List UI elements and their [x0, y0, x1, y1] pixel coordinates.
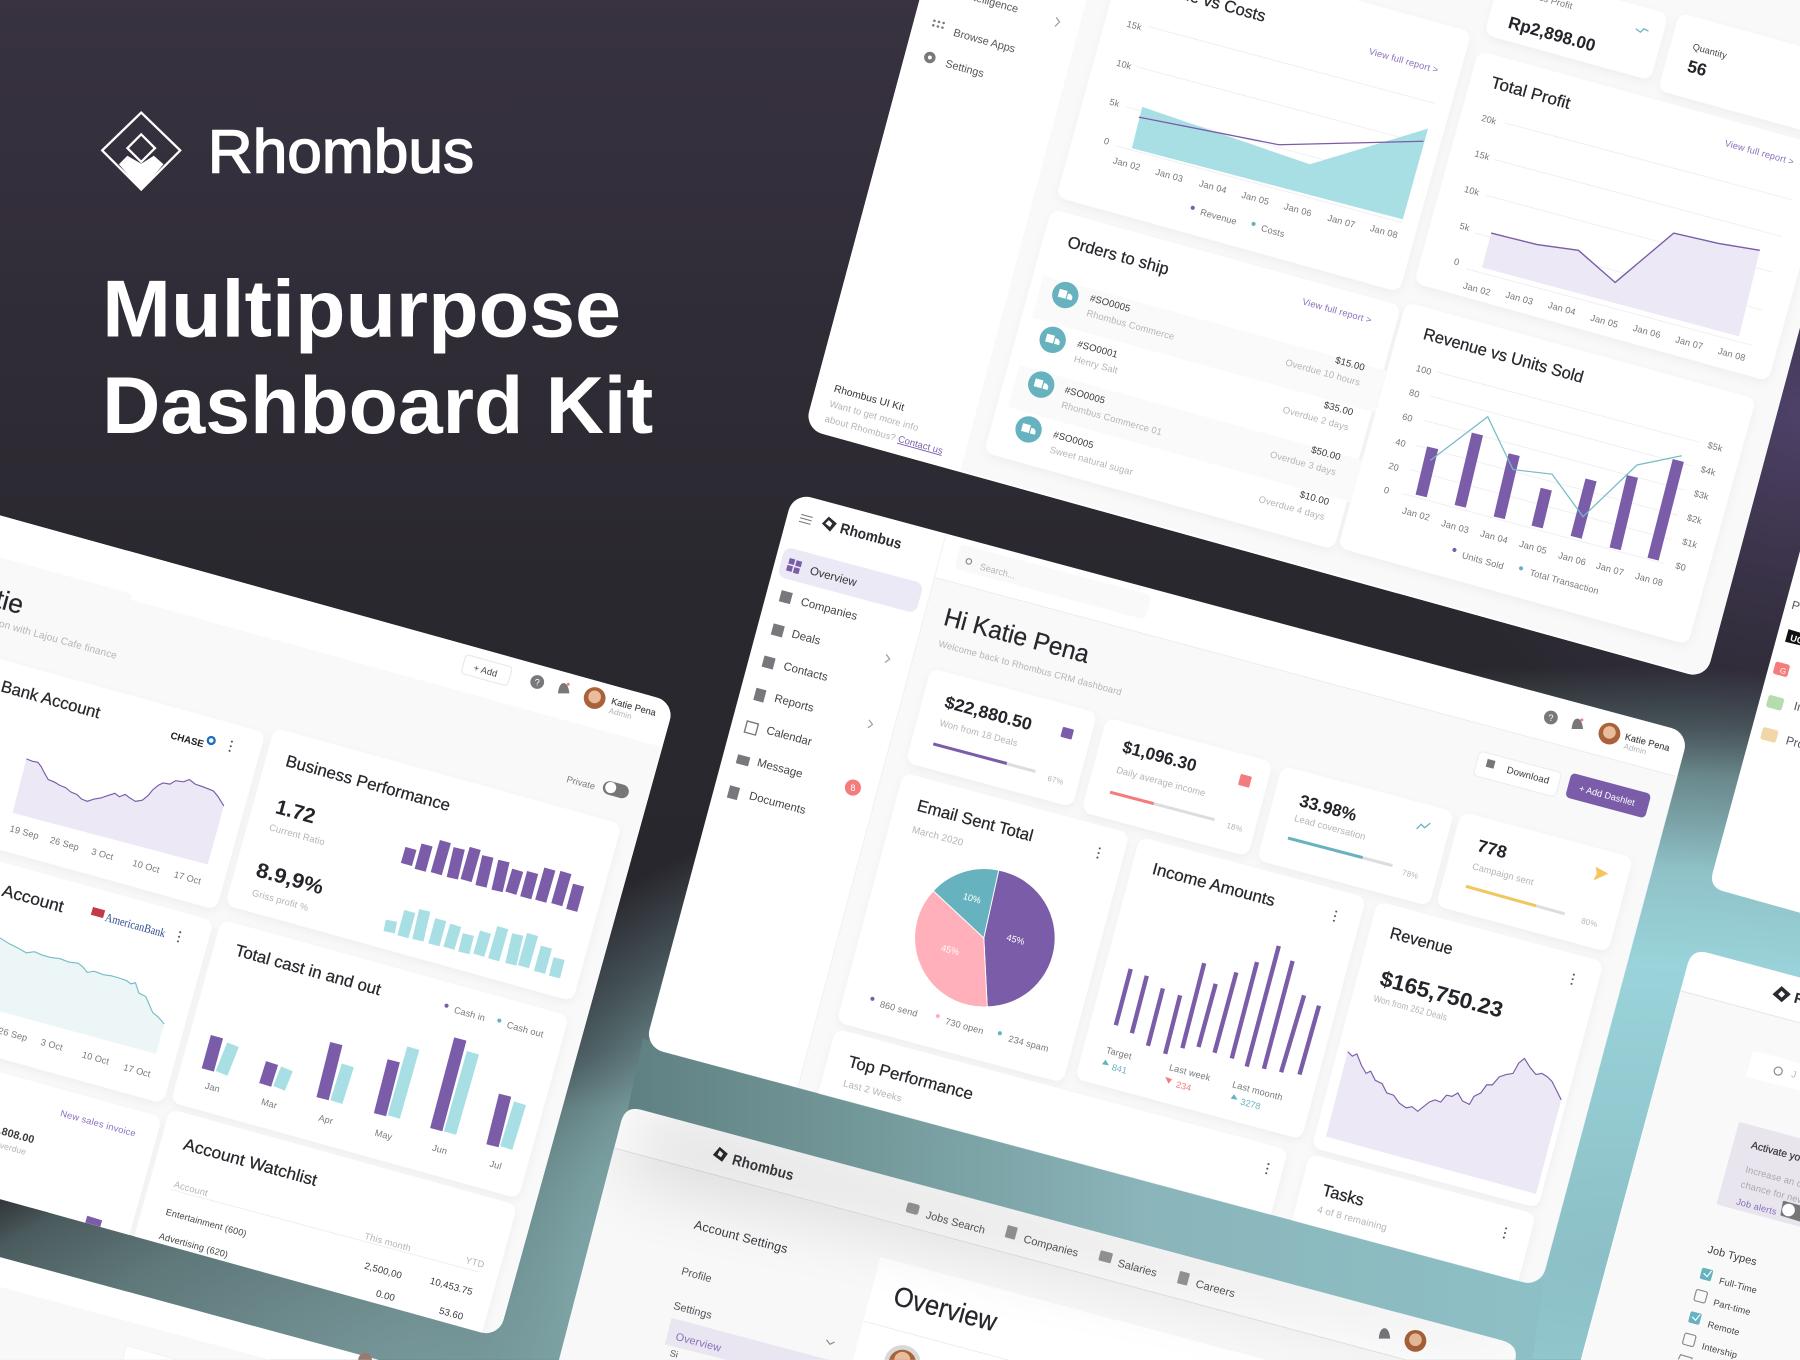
icon: company badge red: G [1779, 666, 1787, 676]
chart: email sent total: 10% [962, 891, 982, 906]
chart: revenue vs costs: 10k [1115, 58, 1133, 72]
chart: american bank account [0, 881, 181, 1079]
menu icons [727, 590, 793, 800]
icon: rhombus mark [102, 113, 180, 189]
chart: total cash in and out [204, 941, 545, 1172]
main area [0, 1287, 271, 1360]
stat: campaign sent [1466, 835, 1608, 929]
chart: revenue vs units sold: $1k [1681, 536, 1699, 550]
chart: income amounts: Last moonth [1231, 1079, 1284, 1103]
table: account watchlist: Entertainment (600) [165, 1207, 248, 1239]
main area [0, 747, 662, 1334]
menu items: Companies [799, 596, 859, 623]
chart: total cash in and out: Jan [204, 1081, 221, 1094]
search field: Search... [979, 561, 1017, 581]
icon: overview [786, 558, 802, 574]
top navigation: Companies [1022, 1233, 1080, 1260]
greeting: Hi Katie Pena [941, 603, 1093, 669]
header tools: Admin [608, 706, 633, 721]
chart: revenue vs costs: Costs [1260, 223, 1286, 239]
panel: bottom-left finance dashboard [0, 457, 675, 1360]
table: account watchlist: 0.00 [375, 1288, 396, 1304]
logo [822, 517, 837, 532]
card: business performance [225, 728, 622, 1001]
panel: bottom-left partial screen [0, 1257, 379, 1360]
icon: hamburger [799, 514, 813, 524]
stat: quantity: 56 [1685, 56, 1709, 80]
chart: american bank account: AmericanBank [104, 910, 168, 940]
list: orders to ship: Overdue 10 hours [1284, 356, 1362, 388]
chart: revenue vs costs: Jan 03 [1154, 167, 1184, 184]
card: revenue vs units sold [1342, 324, 1400, 536]
chart: total profit: 15k [1473, 148, 1491, 162]
chart: email sent total: March 2020 [911, 825, 965, 849]
chart: total profit: Jan 06 [1632, 323, 1662, 340]
callout: activate profile [1718, 1124, 1800, 1225]
logo: Rhombus brand [102, 113, 474, 189]
top navigation [905, 1202, 1237, 1300]
header tools: Katie Pena [1624, 732, 1672, 753]
avatar [358, 1353, 372, 1360]
chart: revenue vs units sold: Total Transaction [1529, 567, 1600, 596]
chart: income amounts: 234 [1175, 1079, 1192, 1093]
table: account watchlist: Account [173, 1178, 210, 1198]
filter: job types: Part-time [1712, 1298, 1752, 1317]
chart: total profit: Total Profit [1489, 73, 1573, 113]
menu items: Documents [748, 790, 807, 817]
sidebar: promo text: about Rhombus? Contact us [824, 413, 944, 456]
card: won deals [906, 668, 1097, 807]
chart: total profit: 0 [1453, 256, 1460, 267]
chart: revenue vs units sold [1383, 324, 1724, 596]
logo [713, 1147, 728, 1162]
chart: income amounts [1102, 859, 1337, 1112]
sidebar: promo text: Rhombus UI Kit [833, 384, 905, 414]
sidebar menu: Profile [680, 1266, 713, 1285]
card: invoices [0, 1199, 130, 1235]
chart: total cash in and out: Jun [431, 1143, 448, 1156]
chart: total profit: Jan 07 [1674, 334, 1704, 352]
table: account watchlist: Advertising (620) [158, 1231, 229, 1260]
chart: revenue vs costs: 15k [1126, 19, 1143, 33]
card: account watchlist [134, 1236, 482, 1333]
chart: revenue vs costs: 0 [1103, 136, 1110, 147]
table: account watchlist: 10,453.75 [429, 1276, 474, 1298]
card: american bank account [0, 829, 214, 1103]
panel: job search screen [559, 1102, 1538, 1360]
search field [1746, 1050, 1800, 1091]
top navigation: Careers [1194, 1278, 1237, 1300]
search field: J [1790, 1068, 1798, 1080]
main area [1582, 991, 1800, 1360]
list: orders to ship: Rhombus Commerce 01 [1060, 399, 1163, 437]
chart: total profit: Jan 04 [1547, 300, 1577, 317]
chart: revenue vs costs [1103, 0, 1439, 240]
chart: email sent total: 730 open [944, 1016, 985, 1036]
chart: email sent total: 860 send [879, 999, 919, 1019]
stat: quantity [1688, 44, 1727, 76]
chart: total profit: Jan 05 [1589, 313, 1619, 330]
stat: quantity: Quantity [1692, 42, 1728, 61]
chart: total cash in and out: Mar [260, 1097, 278, 1111]
chart: total profit [1453, 73, 1795, 363]
menu: active item [777, 546, 924, 614]
icon: company badge beige [1760, 727, 1779, 743]
chart: business performance: Private [565, 774, 596, 792]
chart: bank account: 26 Sep [49, 835, 80, 853]
card: orders to ship [984, 209, 1401, 549]
list: orders to ship: $15.00 [1334, 355, 1366, 374]
chart: revenue vs units sold: 0 [1383, 485, 1390, 496]
sidebar: promo text: Want to get more info [828, 398, 920, 433]
menu items [748, 565, 859, 817]
panel: top-right reports dashboard [804, 0, 1800, 679]
list: orders to ship: #SO0005 [1063, 385, 1106, 407]
stat: campaign sent: 778 [1475, 835, 1510, 862]
panel: center CRM dashboard [645, 493, 1689, 1292]
title: Dashboard Kit [102, 361, 653, 451]
panel: right job filter screen [1581, 952, 1800, 1360]
chart: bank account: CHASE [169, 730, 205, 750]
list: orders to ship: View full report > [1301, 297, 1373, 325]
chart: business performance [251, 751, 630, 977]
button: download [1473, 751, 1562, 797]
stat: lead conversation: 33.98% [1297, 790, 1359, 825]
chart: income amounts: 3278 [1239, 1097, 1262, 1112]
sidebar menu [665, 1218, 835, 1360]
stat: lead conversation [1288, 790, 1430, 881]
chart: bank account: 17 Oct [173, 869, 203, 887]
top navigation: Salaries [1116, 1258, 1159, 1280]
chart: total profit: Jan 08 [1717, 346, 1747, 363]
chart: revenue vs costs: Revenue [1199, 207, 1238, 227]
filter: job types: Remote [1706, 1319, 1741, 1338]
chart: total profit: View full report > [1724, 138, 1795, 167]
chart: revenue vs costs: Jan 06 [1283, 201, 1313, 218]
list: orders to ship [1008, 232, 1386, 522]
stat: campaign sent: 80% [1580, 916, 1598, 929]
chart: bank account: 19 Sep [9, 823, 40, 841]
main area [1526, 776, 1678, 1283]
sidebar divider [797, 530, 947, 1092]
chart: business performance: 1.72 [273, 795, 318, 828]
chart: total cash in and out: Jul [488, 1159, 503, 1172]
chart: total cash in and out: Cash in [453, 1005, 486, 1023]
list: orders to ship: #SO0005 [1052, 430, 1095, 451]
card: daily income [1081, 718, 1273, 856]
card: tasks [1289, 1154, 1536, 1292]
chevrons [868, 654, 890, 728]
chart: bank account: 10 Oct [131, 858, 161, 875]
icon: company badge black [1785, 629, 1800, 646]
panel: right company list screen [1712, 551, 1800, 913]
title: Multipurpose [102, 264, 621, 354]
header tools: Katie Pena [610, 696, 658, 718]
list: orders to ship: Overdue 3 days [1269, 448, 1338, 477]
list: orders to ship: #SO0001 [1076, 339, 1119, 361]
card: total profit [1414, 51, 1800, 381]
list: orders to ship: #SO0005 [1089, 293, 1132, 315]
card content: tasks: 4 of 8 remaining [1316, 1205, 1388, 1234]
stat: lead conversation: 78% [1401, 868, 1419, 881]
button: add dashlet: + Add Dashlet [1578, 783, 1636, 808]
stat: gross profit: Rp2,898.00 [1506, 12, 1598, 55]
chart: total profit: 10k [1463, 184, 1481, 198]
chart: revenue vs costs: Jan 02 [1112, 155, 1142, 173]
chart: total cash in and out: Total cast in and out [233, 941, 383, 999]
chart: revenue: Revenue [1388, 923, 1455, 958]
card: gross profit [1484, 0, 1669, 80]
chart: bank account: 3 Oct [90, 846, 115, 862]
chart: bank account [0, 677, 233, 887]
cards group [0, 1199, 482, 1333]
list: orders to ship: Henry Salt [1073, 353, 1119, 376]
card: revenue [1312, 901, 1604, 1208]
header tools [1544, 711, 1672, 756]
card: quantity [1658, 13, 1800, 136]
sidebar: menu items: Browse Apps [952, 27, 1017, 56]
card content: tasks [1316, 1181, 1507, 1239]
chart: revenue vs units sold: $4k [1700, 464, 1717, 478]
header tools: ? [535, 677, 540, 687]
chart: total cash in and out: Apr [317, 1113, 334, 1126]
logo [1772, 986, 1791, 1002]
badge: 8 [850, 783, 855, 793]
chart: email sent total: 45% [940, 943, 960, 957]
chart: american bank account: 10 Oct [81, 1050, 111, 1067]
chart: total profit: Jan 02 [1462, 280, 1492, 298]
pie chart [915, 869, 1055, 1007]
chart: income amounts: Target [1105, 1045, 1133, 1062]
stat: gross profit [1506, 0, 1648, 55]
search field [123, 1345, 178, 1360]
chart: income amounts: Last week [1168, 1062, 1212, 1083]
header tools: Admin [1623, 742, 1648, 756]
button: add dashlet [1565, 773, 1651, 818]
chart: american bank account: Account [0, 881, 66, 916]
table: account watchlist: This month [363, 1230, 412, 1253]
card content: top performance: Last 2 Weeks [842, 1078, 903, 1105]
sidebar: promo text [824, 384, 944, 456]
stat: daily income: $1,096.30 [1121, 737, 1199, 775]
brand name: Rhombus [208, 117, 474, 185]
title [102, 264, 653, 451]
chart: american bank account: 17 Oct [122, 1062, 152, 1079]
chart: revenue vs units sold: Jan 02 [1401, 505, 1431, 523]
shadow cast from center panel [620, 1110, 1471, 1342]
chart: email sent total: 234 spam [1007, 1034, 1050, 1054]
chart: business performance: Current Ratio [268, 821, 326, 847]
chart: revenue vs costs: Jan 07 [1327, 213, 1356, 230]
table: account watchlist: YTD [464, 1254, 486, 1270]
brand name: Rhombus [838, 520, 904, 553]
chart: revenue vs units sold: Revenue vs Units Sold [1421, 324, 1586, 387]
button: download: Download [1505, 765, 1550, 787]
menu items: Calendar [765, 725, 813, 749]
top bar divider [614, 1148, 1406, 1360]
chart: revenue vs units sold: Units Sold [1461, 550, 1505, 571]
heading: Overview: Overview [890, 1280, 1001, 1337]
top navigation: Jobs Search [924, 1209, 986, 1237]
callout: activate profile: Job alerts [1735, 1197, 1778, 1217]
card: revenue vs costs [1056, 0, 1471, 292]
chart: revenue vs units sold: Jan 08 [1634, 571, 1664, 588]
list: orders to ship: Rhombus Commerce [1085, 307, 1176, 342]
avatar [1405, 1330, 1426, 1352]
chart: email sent total [870, 796, 1101, 1054]
card content: top performance [842, 1052, 1270, 1174]
card: total cash in and out [171, 920, 569, 1198]
table: account watchlist: 2,500,00 [363, 1261, 403, 1282]
sidebar: menu items [918, 0, 1060, 80]
header tools: + Add [472, 663, 499, 679]
chart: income amounts: Income Amounts [1150, 859, 1277, 910]
chart: revenue vs units sold: 20 [1387, 461, 1400, 473]
stat: won deals: Won from 18 Deals [939, 717, 1019, 748]
chart: revenue vs costs: Jan 08 [1369, 223, 1399, 240]
list: orders to ship: $35.00 [1322, 400, 1354, 419]
icon: bell [1379, 1328, 1390, 1339]
chart: revenue vs units sold: 60 [1401, 411, 1414, 424]
filter: job types: Job Types [1706, 1244, 1759, 1269]
chart: american bank account: 3 Oct [40, 1037, 64, 1053]
chart: bank account: Bank Account [0, 677, 103, 722]
chart: email sent total: Email Sent Total [915, 796, 1035, 845]
sidebar menu: Overview [674, 1331, 723, 1355]
chart: revenue vs units sold: Jan 03 [1440, 518, 1470, 535]
chart: revenue vs costs: Jan 05 [1240, 190, 1270, 207]
sidebar menu: Si [669, 1348, 679, 1360]
icon: company badge green [1766, 695, 1785, 711]
stat: campaign sent: Campaign sent [1471, 860, 1535, 887]
filter: job types: Full-Time [1718, 1276, 1758, 1295]
profile avatar [884, 1345, 920, 1360]
stat: daily income: Daily average income [1115, 764, 1207, 798]
header tools [461, 654, 658, 721]
chart: business performance: Business Performance [284, 751, 452, 815]
sidebar menu: Settings [672, 1300, 714, 1322]
card: income amounts [1075, 837, 1366, 1139]
chart: total profit: Jan 03 [1504, 290, 1534, 307]
content card [853, 1257, 1266, 1360]
menu items: Contacts [782, 661, 829, 684]
chart: revenue vs costs: Jan 04 [1198, 178, 1228, 196]
chart: total profit: 20k [1480, 113, 1498, 127]
chart: revenue vs units sold: $5k [1706, 440, 1724, 454]
card: email sent [837, 773, 1130, 1083]
chart: total cash in and out: May [374, 1128, 394, 1142]
menu items: Overview [809, 565, 859, 589]
card: lead conversation [1257, 766, 1454, 906]
chart: email sent total: 45% [1005, 932, 1026, 947]
chart: revenue vs units sold: Jan 07 [1595, 561, 1625, 578]
chart: revenue: $165,750.23 [1377, 966, 1506, 1023]
header tools: ? [1548, 713, 1553, 723]
main background [559, 1148, 1406, 1360]
stat: lead conversation: Lead coversation [1293, 812, 1367, 842]
chart: total cash in and out: Cash out [506, 1020, 545, 1040]
menu items: Message [756, 757, 804, 781]
search field [0, 556, 133, 616]
stat: daily income [1110, 737, 1252, 834]
chart: revenue vs units sold: Jan 06 [1557, 550, 1587, 567]
stat: won deals: 67% [1046, 774, 1065, 787]
chart: total profit: 5k [1459, 221, 1471, 233]
greeting: Welcome back to Rhombus CRM dashboard [937, 638, 1123, 697]
chart: revenue vs units sold: 100 [1415, 363, 1433, 377]
menu items: Reports [773, 693, 815, 715]
card content: tasks: Tasks [1320, 1181, 1366, 1210]
table: account watchlist: 53.60 [438, 1306, 464, 1323]
greeting [937, 603, 1123, 697]
list: orders to ship: $10.00 [1298, 489, 1330, 508]
search field [954, 544, 1152, 620]
chart: revenue: Won from 262 Deals [1372, 992, 1449, 1023]
chart: revenue vs units sold: $2k [1686, 512, 1703, 526]
sidebar: menu items: Settings [944, 58, 986, 80]
badge [845, 780, 861, 796]
chart: revenue vs costs: View full report > [1368, 46, 1439, 75]
list: orders to ship: $50.00 [1310, 445, 1342, 463]
sidebar menu: Account Settings [693, 1218, 789, 1256]
card: campaign sent [1436, 812, 1633, 952]
stat: daily income: 18% [1226, 821, 1244, 834]
card: bank account [0, 641, 265, 910]
menu items: Deals [790, 628, 822, 648]
chart: revenue vs units sold: Jan 05 [1518, 539, 1548, 556]
chart: business performance: Griss profit % [251, 887, 310, 913]
card content: top performance: Top Performance [846, 1052, 975, 1104]
cards group [984, 0, 1800, 644]
sidebar [727, 514, 924, 817]
stat: won deals: $22,880.50 [943, 692, 1034, 734]
list: orders to ship: Overdue 4 days [1258, 493, 1326, 522]
card divider [864, 1321, 1008, 1360]
filter: job types [1678, 1244, 1759, 1360]
brand name: Rhombus [730, 1152, 796, 1184]
table: account watchlist: Account Watchlist [181, 1135, 320, 1190]
list: orders to ship: Overdue 2 days [1282, 404, 1350, 433]
table: account watchlist [158, 1135, 486, 1323]
list: orders to ship: Sweet natural sugar [1049, 444, 1134, 477]
card content: new sales invoice: New sales invoice [59, 1108, 137, 1139]
icon: company badge red [1773, 661, 1790, 677]
cards group [815, 668, 1633, 1292]
chart: revenue [1326, 923, 1575, 1194]
chart: revenue vs units sold: 80 [1408, 387, 1421, 400]
chart: revenue vs units sold: 40 [1394, 437, 1407, 449]
top bar divider [934, 577, 1675, 776]
card: top performance [815, 1029, 1288, 1227]
card content: new sales invoice [0, 1110, 136, 1227]
filter: job types: Intership [1701, 1341, 1738, 1360]
chart: revenue vs units sold: $3k [1693, 488, 1710, 502]
stat: won deals [933, 692, 1074, 787]
chart: revenue vs costs: 5k [1108, 97, 1121, 109]
chart: income amounts: 841 [1111, 1062, 1128, 1076]
list: orders to ship: Orders to ship [1065, 232, 1171, 279]
chart: revenue vs units sold: $0 [1674, 561, 1687, 573]
chart: business performance: 8.9,9% [254, 859, 326, 899]
chart: revenue vs units sold: Jan 04 [1479, 528, 1509, 546]
main area [1696, 328, 1800, 674]
